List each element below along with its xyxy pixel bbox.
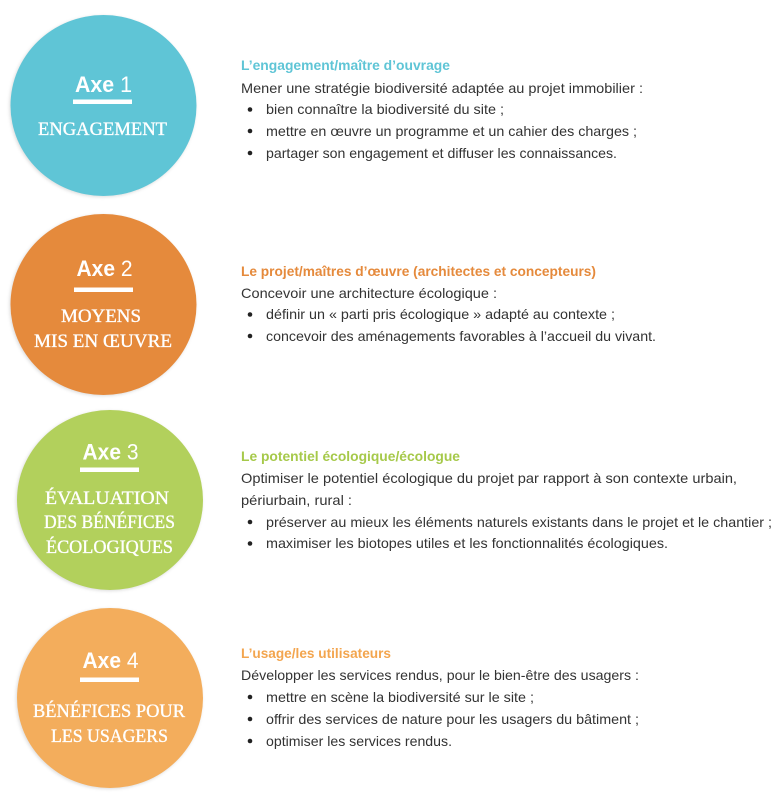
panel: axe 4 text bbox=[241, 645, 639, 749]
axe 2 title: MOYENS bbox=[61, 306, 141, 327]
axe 1 heading: L’engagement/maître d’ouvrage bbox=[241, 57, 450, 73]
panel: axe 2 text: concevoir des aménagements favorables à l’accueil du vivant. bbox=[266, 328, 656, 344]
panel: axe 3 text: périurbain, rural : bbox=[241, 492, 352, 508]
panel: axe 2 text: Concevoir une architecture écologique : bbox=[241, 285, 497, 301]
panel: axe 4 text: mettre en scène la biodiversité sur le site ; bbox=[266, 689, 534, 705]
panel: axe 2 circle bbox=[10, 214, 196, 395]
axe 3 label: Axe 3 bbox=[82, 440, 138, 464]
panel: axe 1 text: partager son engagement et diffuser les connaissances. bbox=[266, 145, 617, 161]
panel: axe 4 text: optimiser les services rendus. bbox=[266, 733, 452, 749]
axe 2 heading: Le projet/maîtres d’œuvre (architectes et concepteurs) bbox=[241, 263, 596, 279]
panel: axe 2 text: définir un « parti pris écologique » adapté au contexte ; bbox=[266, 306, 615, 322]
axe 4 title: BÉNÉFICES POUR bbox=[33, 700, 185, 722]
axe 1 title: ENGAGEMENT bbox=[38, 119, 167, 140]
axe 4 label: Axe 4 bbox=[82, 648, 138, 673]
panel: axe 1 circle bbox=[10, 15, 196, 196]
panel: axe 3 circle: DES BÉNÉFICES bbox=[44, 511, 175, 533]
axe 3 title: ÉVALUATION bbox=[45, 487, 169, 509]
panel: axe 1 text: Mener une stratégie biodiversité adaptée au projet immobilier : bbox=[241, 80, 643, 96]
panel: axe 3 text bbox=[241, 448, 772, 551]
panel: axe 1 text: bien connaître la biodiversité du site ; bbox=[266, 101, 504, 117]
panel: axe 4 text: offrir des services de nature pour les usagers du bâtiment ; bbox=[266, 711, 639, 727]
axe 2 label: Axe 2 bbox=[76, 256, 132, 281]
panel: axe 3 text: maximiser les biotopes utiles et les fonctionnalités écologiques. bbox=[266, 535, 668, 551]
panel: axe 3 circle bbox=[17, 410, 203, 590]
axe 3 heading: Le potentiel écologique/écologue bbox=[241, 448, 460, 464]
panel: axe 2 text bbox=[241, 263, 656, 344]
panel: axe 2 circle: MIS EN ŒUVRE bbox=[34, 331, 172, 352]
panel: axe 4 text: Développer les services rendus, pour le bien-être des usagers : bbox=[241, 667, 639, 683]
panel: axe 3 circle: ÉCOLOGIQUES bbox=[46, 536, 173, 558]
panel: axe 1 text bbox=[241, 57, 643, 161]
panel: axe 4 circle: LES USAGERS bbox=[51, 726, 168, 747]
axe 4 heading: L’usage/les utilisateurs bbox=[241, 645, 391, 661]
panel: axe 3 text: préserver au mieux les éléments naturels existants dans le projet et le chantier ; bbox=[266, 514, 772, 530]
panel: axe 3 text: Optimiser le potentiel écologique du projet par rapport à son contexte urbain, bbox=[241, 470, 737, 486]
axe 1 label: Axe 1 bbox=[75, 72, 132, 97]
panel: axe 1 text: mettre en œuvre un programme et un cahier des charges ; bbox=[266, 123, 637, 139]
panel: axe 4 circle bbox=[17, 608, 203, 788]
